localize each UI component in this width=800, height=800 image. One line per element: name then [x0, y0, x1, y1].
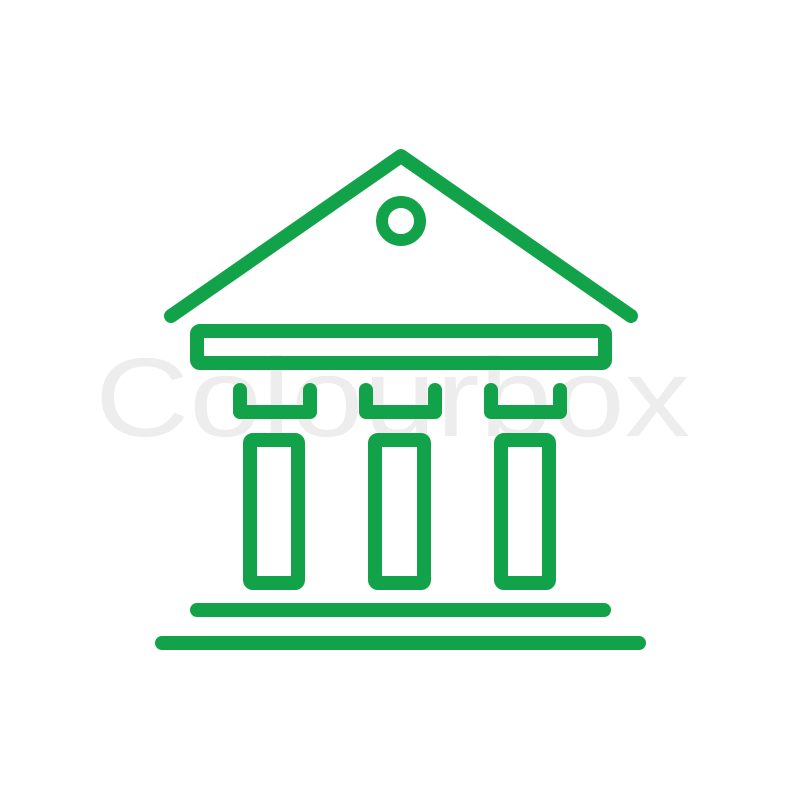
columns [250, 440, 549, 583]
base steps [162, 610, 639, 643]
entablature [197, 331, 605, 363]
roof circle [382, 202, 420, 240]
capitals [240, 390, 560, 412]
watermark text: Colourbox [95, 335, 690, 460]
icon: temple building [162, 156, 639, 643]
roof [171, 156, 631, 316]
